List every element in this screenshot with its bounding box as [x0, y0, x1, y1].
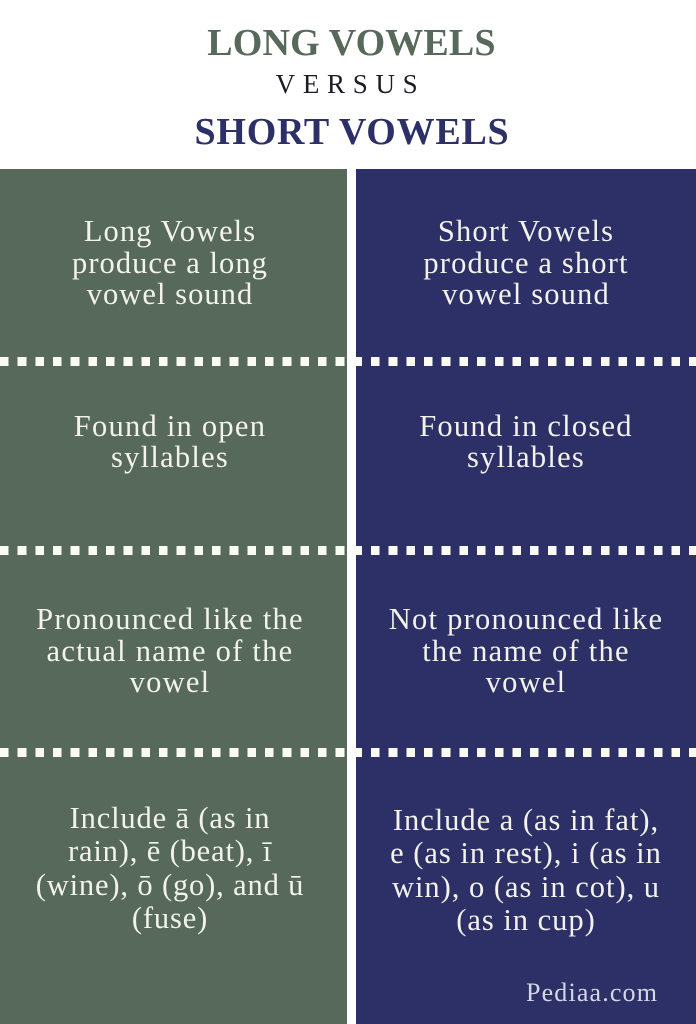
text: short vowels syllables [419, 408, 633, 474]
text: long vowels pronunciation: Pronounced like the [36, 602, 304, 636]
text: long vowels pronunciation [36, 602, 304, 699]
text: long vowels examples: (fuse) [132, 901, 208, 935]
text: long vowels sound [72, 214, 268, 311]
text: long vowels examples: Include ā (as in [70, 801, 270, 835]
divider row 3 [0, 748, 696, 757]
text: long vowels pronunciation: vowel [130, 665, 210, 699]
text: long vowels sound: produce a long [72, 246, 268, 280]
divider row 1 [0, 357, 696, 366]
panel: long vowels column [0, 169, 347, 1024]
text: short vowels pronunciation [389, 602, 663, 699]
text: long vowels pronunciation: actual name of the [47, 634, 293, 668]
text: short vowels syllables: syllables [467, 440, 585, 474]
text: short vowels pronunciation: the name of the [422, 634, 630, 668]
text: short vowels pronunciation: Not pronounced like [389, 602, 663, 636]
text: short vowels pronunciation: vowel [486, 665, 566, 699]
title: long vowels: LONG VOWELS [207, 22, 496, 64]
text: short vowels examples: (as in cup) [456, 903, 596, 937]
text: short vowels sound [423, 214, 629, 311]
text: short vowels sound: produce a short [423, 246, 629, 280]
text: short vowels examples: Include a (as in fat), [393, 803, 659, 837]
divider row 2 [0, 546, 696, 555]
title: short vowels: SHORT VOWELS [195, 111, 509, 153]
text: short vowels sound: vowel sound [442, 277, 610, 311]
text: short vowels examples [390, 803, 662, 937]
text: short vowels sound: Short Vowels [438, 214, 614, 248]
text: long vowels examples [36, 801, 304, 935]
text: long vowels examples: (wine), ō (go), and ū [36, 868, 304, 902]
text: short vowels examples: win), o (as in cot), u [392, 870, 660, 904]
subtitle: versus: VERSUS [276, 69, 425, 99]
logo: Pediaa.com: Pediaa.com [526, 978, 658, 1007]
text: long vowels sound: vowel sound [87, 277, 253, 311]
text: long vowels sound: Long Vowels [84, 214, 256, 248]
text: short vowels examples: e (as in rest), i (as in [390, 836, 662, 870]
text: long vowels syllables: syllables [111, 440, 229, 474]
text: long vowels syllables [74, 408, 266, 474]
text: long vowels syllables: Found in open [74, 408, 266, 442]
text: short vowels syllables: Found in closed [419, 408, 633, 442]
panel: short vowels column [356, 169, 696, 1024]
text: long vowels examples: rain), ē (beat), ī [68, 834, 272, 868]
